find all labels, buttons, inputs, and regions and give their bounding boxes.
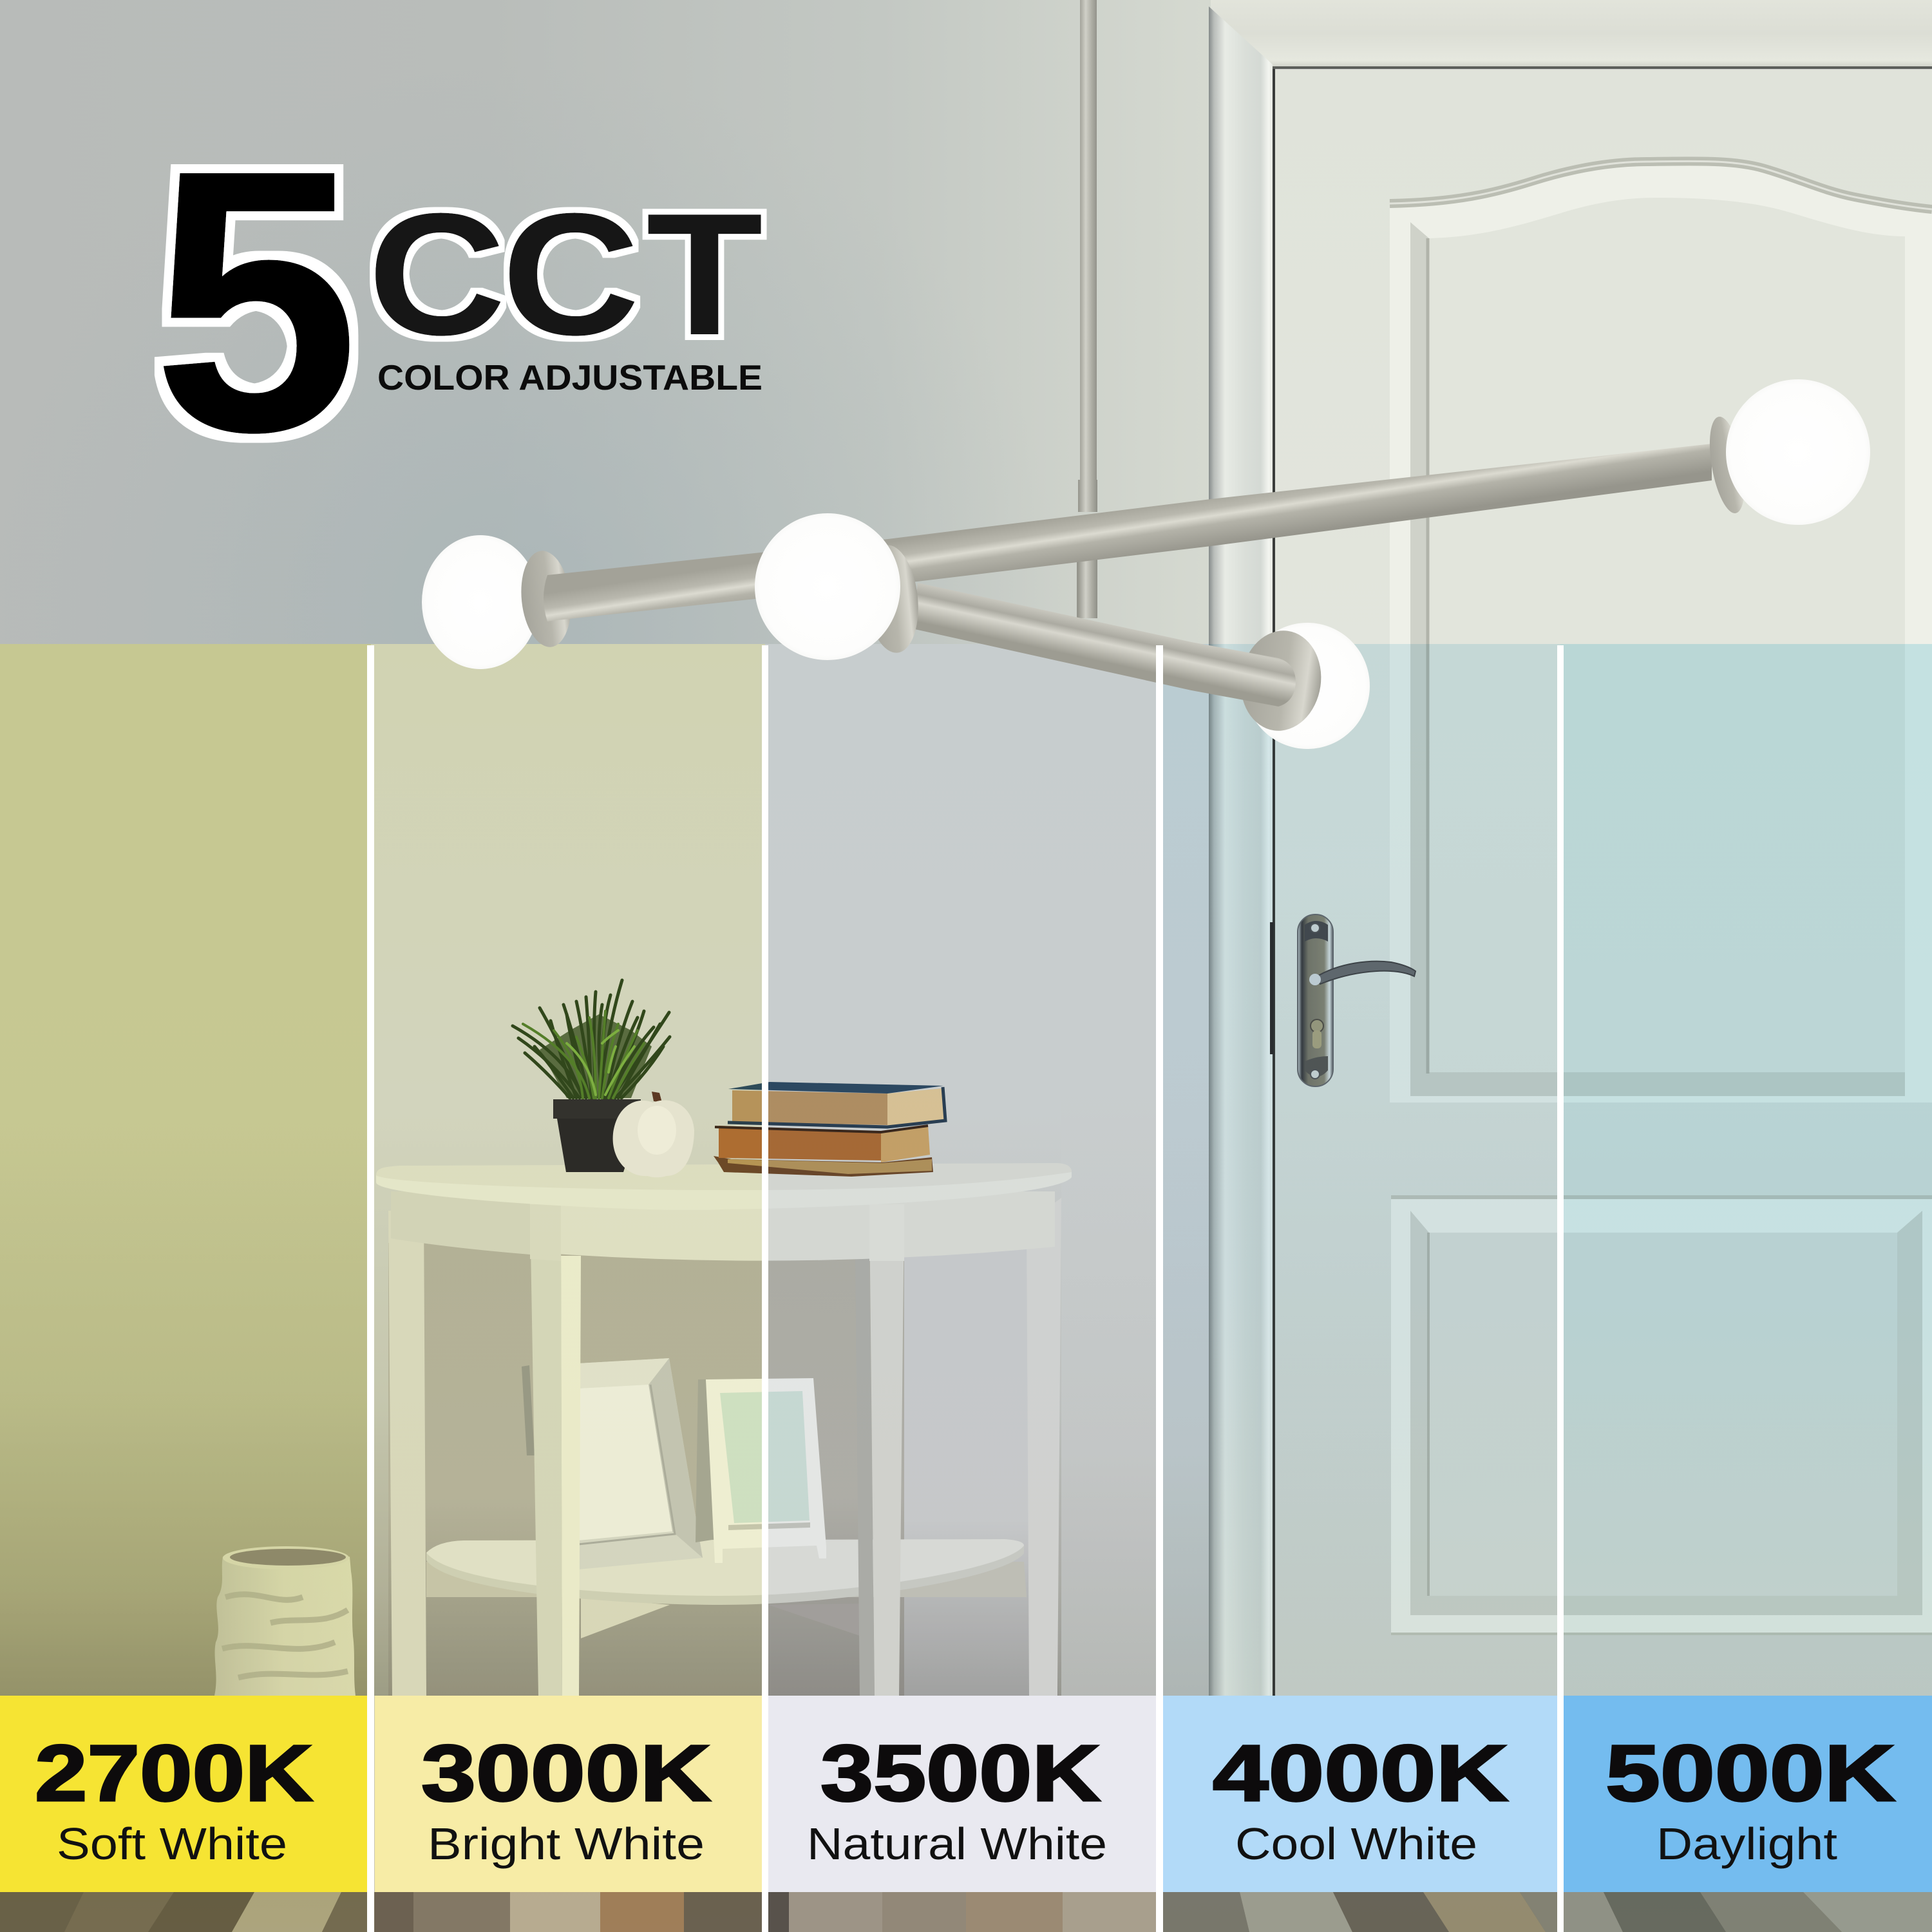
shadowed wall under table bbox=[388, 1243, 1058, 1696]
5000K label bar bbox=[1564, 1696, 1932, 1892]
door slab bbox=[1275, 70, 1932, 1696]
lighter wall under table right bbox=[904, 1243, 1030, 1696]
3000K label bar: 3000K bbox=[421, 1729, 711, 1818]
table and decor bbox=[376, 980, 1072, 1696]
CCT heading: CCT bbox=[368, 177, 763, 372]
3000K label bar bbox=[375, 1696, 762, 1892]
left flange bbox=[516, 548, 576, 650]
table apron bbox=[391, 1191, 1055, 1261]
3500K label bar: Natural White bbox=[807, 1819, 1107, 1869]
4000K label bar bbox=[1163, 1696, 1557, 1892]
lower right bulb bbox=[1245, 623, 1370, 749]
left door frame bbox=[1209, 6, 1273, 1696]
front left leg bbox=[530, 1208, 581, 1696]
wooden floor planks bbox=[0, 1892, 1932, 1932]
colour tint overlay: 3000K column bbox=[371, 644, 765, 1932]
door hinge edge bbox=[1270, 922, 1274, 1054]
stacked books bbox=[714, 1082, 945, 1177]
big numeral 5: 5 bbox=[152, 92, 360, 509]
back right leg bbox=[1027, 1198, 1061, 1696]
title lockup bbox=[152, 92, 763, 509]
ceiling rod bbox=[1077, 0, 1097, 618]
column divider lines bbox=[367, 645, 1564, 1932]
bottom book bbox=[714, 1156, 933, 1177]
table top bbox=[376, 1163, 1072, 1210]
centre bulb bbox=[755, 513, 900, 660]
4000K label bar: Cool White bbox=[1235, 1819, 1477, 1869]
pendant light fixture bbox=[422, 0, 1870, 749]
3500K label bar: 3500K bbox=[820, 1729, 1101, 1818]
back left leg bbox=[388, 1211, 426, 1696]
front right leg bbox=[855, 1208, 904, 1696]
colour tint overlay: 4000K column bbox=[1159, 644, 1560, 1932]
door with frame bbox=[1209, 0, 1932, 1696]
4000K label bar: 4000K bbox=[1213, 1729, 1508, 1818]
left bulb bbox=[422, 535, 539, 669]
subtitle: COLOR ADJUSTABLE bbox=[377, 357, 762, 397]
middle book bbox=[715, 1125, 930, 1162]
3000K label bar: Bright White bbox=[428, 1819, 705, 1869]
2700K label bar bbox=[0, 1696, 367, 1892]
lower arm bbox=[912, 583, 1296, 706]
table apron segments shade bbox=[391, 1191, 904, 1261]
colour tint overlay: 2700K column bbox=[0, 644, 371, 1932]
door gap shadow lines bbox=[1273, 68, 1275, 1696]
ceramic apple bbox=[613, 1092, 694, 1177]
plant bbox=[513, 980, 670, 1098]
top book bbox=[728, 1082, 945, 1127]
silver picture frame bbox=[522, 1358, 703, 1569]
2700K label bar: Soft White bbox=[57, 1819, 287, 1869]
door handle bbox=[1298, 914, 1416, 1086]
plant pot bbox=[553, 1099, 641, 1172]
colour tint overlay: 5000K column bbox=[1560, 644, 1932, 1932]
shelf back rail bbox=[426, 1562, 1027, 1597]
upper door panel bbox=[1390, 161, 1932, 1103]
centre flange bbox=[860, 542, 923, 656]
door top gap line bbox=[1273, 66, 1932, 69]
5000K label bar: 5000K bbox=[1605, 1729, 1895, 1818]
2700K label bar: 2700K bbox=[35, 1729, 313, 1818]
lower shelf bbox=[426, 1539, 1024, 1605]
lower shelf supports bbox=[581, 1597, 670, 1638]
white easel picture frame bbox=[696, 1378, 826, 1563]
main arm bbox=[544, 444, 1712, 621]
3500K label bar bbox=[768, 1696, 1156, 1892]
5000K label bar: Daylight bbox=[1656, 1819, 1837, 1869]
textured vase bbox=[214, 1546, 355, 1696]
top door trim bbox=[1211, 0, 1932, 67]
lower door panel bbox=[1391, 1195, 1932, 1635]
right flange bbox=[1703, 414, 1751, 516]
colour tint overlay: 3500K column bbox=[765, 644, 1159, 1932]
right bulb bbox=[1726, 379, 1870, 525]
room walls background bbox=[0, 0, 1224, 1696]
lower right flange bbox=[1235, 625, 1327, 736]
